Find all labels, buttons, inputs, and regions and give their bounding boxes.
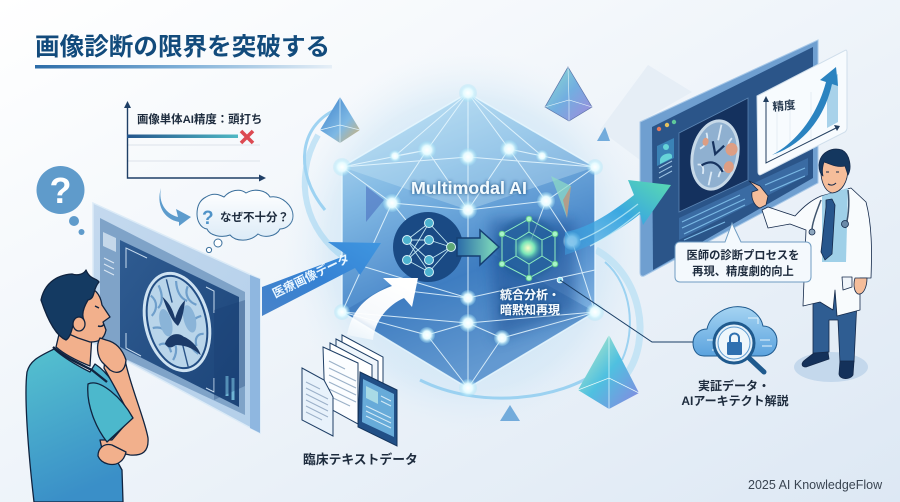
clinical text label: 臨床テキストデータ — [303, 452, 418, 467]
large document — [323, 347, 358, 424]
shirt — [822, 188, 848, 262]
arrow between icons — [457, 230, 499, 265]
prism: top right — [545, 67, 592, 121]
shoes — [802, 352, 829, 367]
arm — [100, 345, 148, 455]
midline and ventricles — [166, 279, 188, 367]
result brain scan — [684, 115, 746, 195]
profile — [657, 138, 674, 166]
evidence data label: 実証データ・ — [698, 378, 770, 393]
inner facets — [366, 186, 384, 222]
hair — [819, 149, 850, 176]
bubble text: ? — [202, 208, 214, 229]
rising curve — [772, 67, 838, 155]
screen — [100, 218, 245, 415]
prism: left — [320, 97, 360, 143]
callout: doctor's diagnostic process: 医師の診断プロセスを — [687, 248, 799, 262]
monitor: result screen — [640, 40, 818, 276]
central AI polyhedron — [283, 50, 653, 440]
leader line — [557, 277, 693, 342]
thought bubble: なぜ不十分？ — [220, 210, 289, 224]
ground shadow — [794, 352, 868, 382]
tablet — [358, 372, 397, 446]
lock — [727, 342, 742, 355]
faint background peaks — [600, 65, 692, 160]
title: 画像診断の限界を突破する — [35, 33, 330, 61]
small document — [302, 368, 333, 436]
prism: bottom right — [578, 335, 639, 409]
plateau line — [127, 134, 238, 138]
white curved arrow: clinical text — [347, 278, 418, 340]
pointing hand — [749, 181, 768, 208]
image pane — [679, 98, 748, 212]
monitor: medical image — [93, 203, 260, 433]
chart label: 画像単体AI精度：頭打ち — [137, 112, 262, 126]
eye and mouth — [95, 306, 104, 326]
head — [821, 153, 848, 193]
curved arrow to thought bubble — [159, 188, 191, 226]
brain scan — [133, 265, 221, 379]
lower hand — [854, 278, 867, 294]
glowing nodes — [333, 84, 604, 397]
dark lower-right panel — [490, 220, 575, 340]
lower hand — [98, 445, 126, 464]
lanyard — [53, 347, 107, 382]
sleeve — [88, 383, 133, 442]
hexagon body — [342, 93, 595, 388]
neural network icon — [393, 212, 463, 282]
network lines — [342, 93, 595, 388]
line chart: image-only AI accuracy plateau — [124, 101, 266, 182]
person thinking — [26, 270, 148, 502]
hair — [41, 270, 99, 340]
window dots — [657, 127, 661, 131]
face details — [826, 172, 839, 185]
coat — [762, 188, 871, 316]
question mark icon with bubbles — [36, 166, 84, 235]
callout: doctor's diagnostic process: 再現、精度劇的向上 — [692, 264, 794, 278]
arrow: output to accuracy — [565, 180, 671, 255]
red cross — [241, 131, 253, 143]
clinical documents — [302, 335, 397, 446]
cloud search icon — [693, 307, 777, 372]
footer credit: 2025 AI KnowledgeFlow — [748, 478, 883, 492]
evidence data label — [681, 378, 789, 408]
integrated hexagon icon — [497, 216, 559, 281]
Multimodal AI label: Multimodal AI — [411, 178, 527, 198]
gyri — [143, 277, 210, 363]
hand on chin — [98, 338, 126, 372]
face — [58, 287, 110, 342]
torso — [26, 349, 132, 502]
integrated analysis label — [500, 287, 560, 317]
small triangles — [500, 127, 610, 421]
neck — [56, 330, 92, 366]
projected shadow — [214, 300, 245, 400]
trousers — [813, 280, 858, 363]
pocket — [842, 277, 852, 290]
arrow: medical image data — [262, 242, 381, 316]
accuracy chart card — [757, 50, 847, 175]
integrated analysis label: 暗黙知再現 — [500, 302, 560, 317]
thought bubble — [197, 190, 293, 253]
doctor — [749, 149, 871, 382]
lower info panel — [679, 158, 808, 240]
axes — [766, 100, 838, 163]
ear — [73, 317, 85, 331]
callout: doctor's diagnostic process — [675, 223, 811, 282]
stethoscope — [812, 190, 849, 230]
evidence data label: AIアーキテクト解説 — [681, 393, 789, 408]
swirl rings — [304, 108, 640, 398]
title underline — [35, 65, 332, 68]
accuracy label: 精度 — [772, 98, 797, 114]
question mark icon with bubbles: ? — [50, 170, 72, 211]
medical image data label: 医療画像データ — [270, 250, 352, 301]
integrated analysis label: 統合分析・ — [500, 287, 560, 302]
tie — [821, 199, 835, 260]
report lines — [682, 168, 805, 240]
